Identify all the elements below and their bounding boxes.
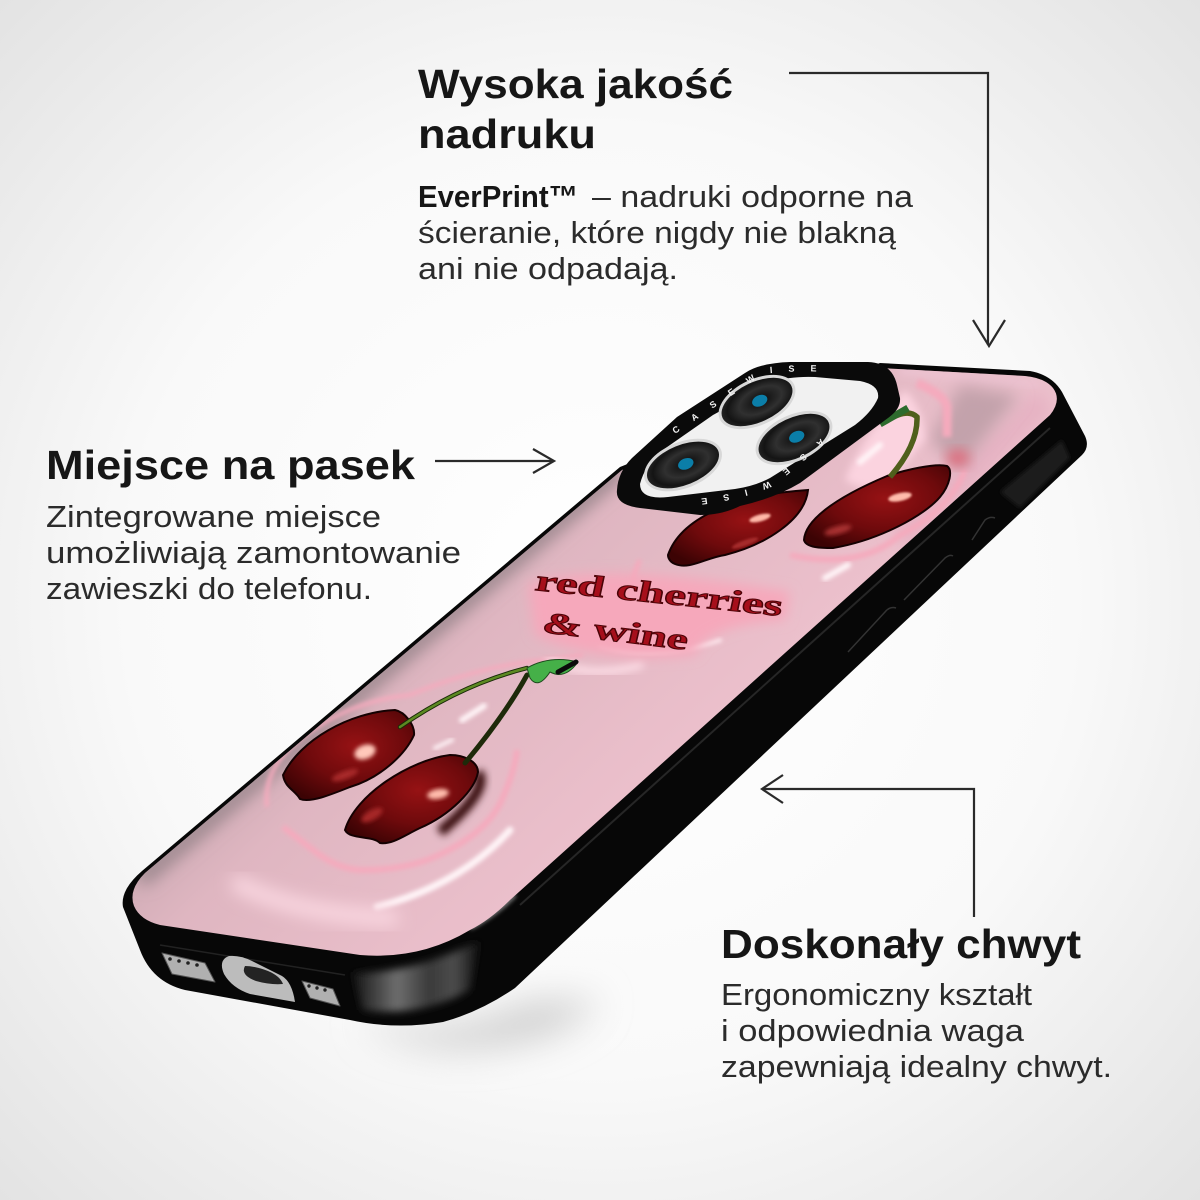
rim lettering [672,365,823,505]
description: EverPrint™ [418,180,578,214]
camera frame [617,362,900,515]
port: left speaker [162,953,215,982]
camera glass [640,377,878,497]
callout: print quality [418,61,913,286]
rim lettering: CASEWISE [701,438,823,505]
heading: Doskonały chwyt [721,921,1081,967]
arrow: print quality [789,73,1005,346]
port: right speaker [302,981,340,1006]
description: ścieranie, które nigdy nie blakną [418,216,896,250]
heading: nadruku [418,111,596,157]
lens: left [636,428,730,502]
glossy corner of case [160,428,1070,1012]
slogan [534,574,782,650]
heading: Miejsce na pasek [46,442,415,488]
heading [418,61,733,157]
cherry: lower right [345,755,480,843]
port: charging [222,956,295,1002]
slogan: & wine [539,606,692,657]
soft highlights [240,445,880,918]
pink printed face [132,368,1057,956]
description: zawieszki do telefonu. [46,572,372,606]
phone shadow [360,1000,600,1050]
pink glow swirls [267,383,965,870]
description: zapewniają idealny chwyt. [721,1050,1112,1084]
lens: right [747,400,841,476]
lens: top [710,364,804,440]
arrow: strap mount [435,449,554,473]
shaded left edge [140,470,620,880]
description: ani nie odpadają. [418,252,678,286]
cherry: upper right [804,465,950,548]
cherry stems and leaf [400,660,578,763]
description [418,180,913,286]
slogan halo [528,574,790,658]
description [721,978,1112,1084]
description: Zintegrowane miejsce [46,500,381,534]
description: Ergonomiczny kształt [721,978,1033,1012]
side buttons [848,517,995,652]
cherry: lower left [283,710,414,800]
camera island [616,362,900,515]
callout: perfect grip [721,921,1112,1084]
case body [123,363,1087,1026]
arrow: perfect grip [762,775,974,917]
phone case illustration [122,362,1087,1026]
callout: strap mount [46,442,461,606]
description [46,500,461,606]
heading: Wysoka jakość [418,61,733,107]
slogan: red cherries [533,564,786,623]
description: i odpowiednia waga [721,1014,1024,1048]
description: umożliwiają zamontowanie [46,536,461,570]
rim lettering: CASEWISE [672,365,816,433]
description: – nadruki odporne na [592,180,913,214]
upper cherry stem [880,408,917,477]
cherry: upper left [668,490,808,566]
